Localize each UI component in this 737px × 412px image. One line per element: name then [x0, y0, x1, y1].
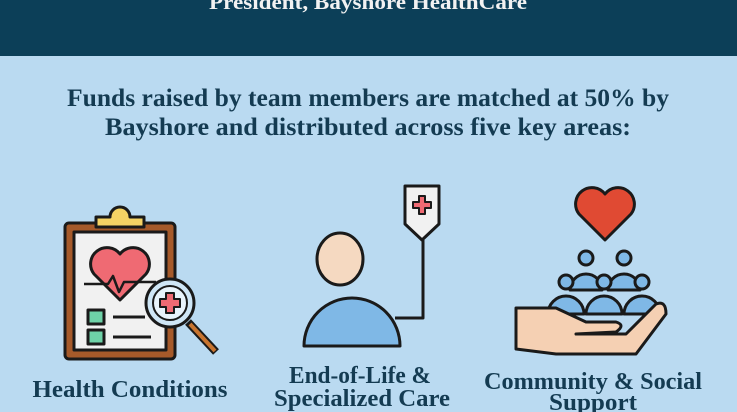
label: End-of-Life & Specialized Care: Specialized Care [274, 386, 450, 412]
intro text: Bayshore and distributed across five key areas: [105, 114, 631, 141]
label: Community & Social Support [484, 369, 702, 412]
icon: patient with IV [304, 186, 439, 346]
label: Health Conditions: Health Conditions [32, 377, 228, 403]
intro text: Funds raised by team members are matched at 50% by [67, 85, 670, 112]
header band [0, 0, 737, 56]
label: End-of-Life & Specialized Care: End-of-Life & [289, 363, 431, 389]
label: End-of-Life & Specialized Care [274, 363, 450, 412]
intro text [67, 85, 670, 141]
icon: clipboard with heart and magnifier [65, 207, 216, 359]
icon: hand holding community [516, 188, 666, 354]
label: Community & Social Support: Community & Social [484, 369, 702, 395]
